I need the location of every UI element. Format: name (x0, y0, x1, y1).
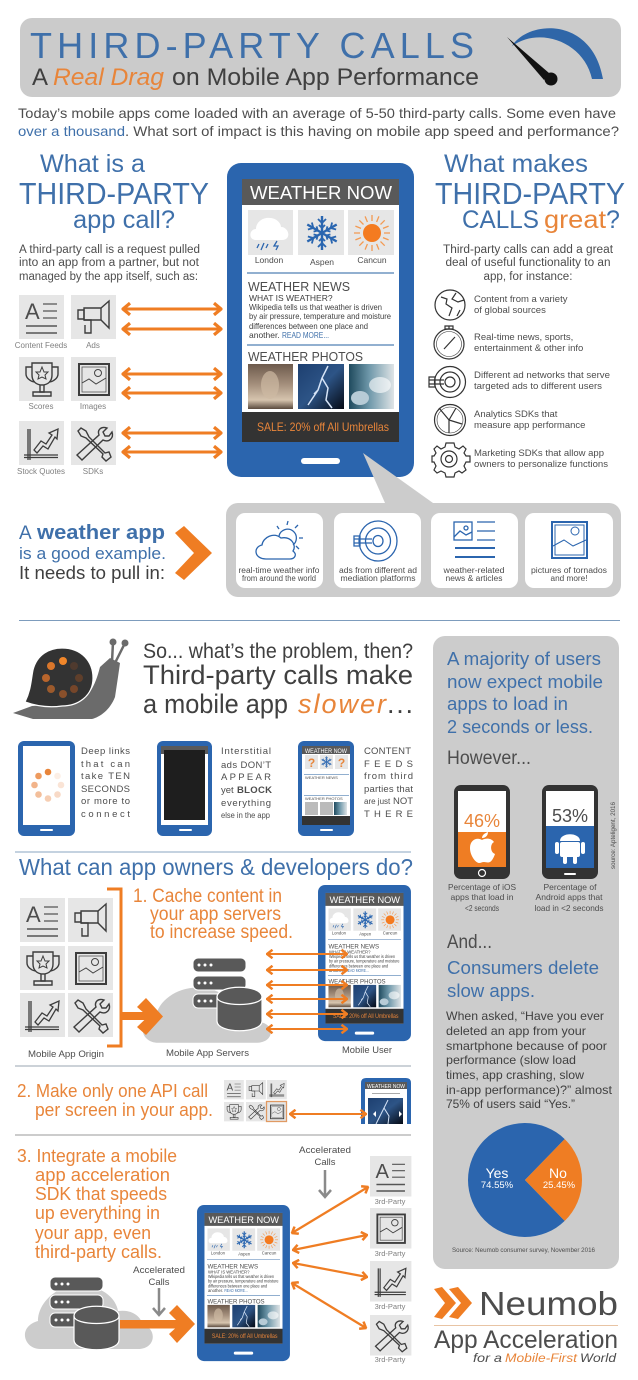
caption: content feeds: CONTENT (364, 746, 411, 757)
mobile app servers cloud (143, 958, 271, 1043)
consumers delete heading: Consumers delete (447, 957, 599, 978)
accelerated calls label top: Calls (314, 1157, 336, 1168)
benefit: global sources: Content from a variety (474, 294, 568, 305)
heading: what is a third-party app call: What is a (40, 150, 145, 178)
heading: the problem: a mobile app (143, 689, 288, 719)
Android caption: load in <2 seconds (534, 903, 604, 913)
step 2 phone: WEATHER NOW (367, 1084, 406, 1090)
phone: Android 53% (542, 785, 598, 879)
mobile user phone: London (332, 931, 347, 936)
benefit: global sources (474, 294, 568, 316)
heading: the problem: . . . (387, 689, 413, 719)
caption: content feeds: NOT (393, 796, 413, 807)
weather app example text: A (19, 523, 32, 544)
mobile user phone: WEATHER PHOTOS (328, 978, 386, 985)
heading: what can developers do: What can app owners & developers do? (19, 854, 413, 880)
heading: what makes third-party calls great (435, 150, 625, 234)
caption: deep links (81, 746, 130, 820)
benefit: ad networks (474, 370, 610, 392)
Neumob logo (434, 1285, 618, 1365)
problem: missing content feeds (298, 741, 413, 836)
icon labels: Ads (86, 341, 100, 350)
third-party icon grid (15, 295, 116, 476)
heading: what makes third-party calls great: great (544, 206, 606, 234)
card: real-time weather (236, 513, 323, 588)
heading: what makes third-party calls great: ? (606, 206, 620, 234)
step 1 labels: Mobile App Servers (166, 1048, 249, 1059)
heading: the problem: slower (298, 689, 387, 719)
phone: weather app (227, 163, 414, 477)
icon labels: SDKs (83, 467, 103, 476)
benefit: marketing SDKs: Marketing SDKs that allow app (474, 448, 604, 459)
caption: interstitial: Interstitial (221, 746, 271, 757)
icon: SDKs (71, 421, 116, 465)
icon: stopwatch (434, 326, 464, 359)
step 3 phone: Cancun (262, 1251, 277, 1256)
heading: what is a third-party app call (19, 150, 209, 234)
source note: source: Apteligent, 2016 (610, 802, 617, 869)
caption: deep links: connect (81, 809, 130, 820)
benefits intro text: app, for instance: (484, 271, 572, 283)
step 3 phone: Wikipedia tells us that weather is driven (208, 1274, 275, 1279)
iOS caption (448, 882, 516, 913)
icon: scores (19, 357, 64, 401)
phone: weather app: WEATHER NOW (250, 183, 392, 203)
caption: deep links: Deep links (81, 746, 130, 757)
benefit: marketing SDKs (474, 448, 608, 470)
expectation heading: 2 seconds or less. (447, 716, 593, 737)
Android caption: Percentage of (544, 882, 597, 892)
however: However... (447, 748, 531, 769)
caption: deep links: or more to (81, 796, 130, 807)
consumers delete heading (447, 957, 599, 1001)
step 3 text: up everything in (35, 1202, 160, 1223)
survey paragraph: times, app crashing, slow (446, 1068, 584, 1082)
caption: interstitial (221, 746, 272, 820)
card: real-time weather: real-time weather info (238, 566, 320, 575)
mobile user phone: differences between one place and (329, 964, 389, 969)
mobile user phone: WHAT IS WEATHER? (329, 950, 371, 955)
step 2 text: per screen in your app. (35, 1099, 213, 1120)
mobile user phone: SALE: 20% off All Umbrellas (333, 1014, 399, 1020)
third-party icons column (370, 1156, 411, 1364)
mobile user phone: Cancun (383, 931, 398, 936)
mobile user phone: Aspen (359, 932, 372, 937)
pie chart (468, 1123, 582, 1237)
expectation heading: now expect mobile (447, 671, 603, 692)
weather app example text: weather app (36, 522, 165, 544)
expectation heading: A majority of users (447, 648, 601, 669)
step 3 phone: WHAT IS WEATHER? (208, 1270, 250, 1275)
card: ad mediation: ads from different ad (339, 566, 417, 575)
caption: content feeds: from third (364, 771, 413, 782)
iOS caption: Percentage of iOS (448, 882, 516, 892)
problem: interstitial ads (157, 741, 272, 836)
step 3 phone: another. (208, 1288, 223, 1293)
caption: deep links: SECONDS (81, 784, 130, 795)
caption: content feeds: THERE (364, 809, 413, 820)
intro text: . What sort of impact is this having on mobile app speed and performance? (125, 123, 619, 139)
survey paragraph: in-app performance)?” almost (446, 1083, 613, 1097)
survey paragraph: 75% of users said “Yes.” (446, 1097, 575, 1111)
title: THIRD-PARTY CALLS (30, 25, 474, 66)
accelerated calls label bottom: Calls (148, 1277, 170, 1288)
step 3 text: 3. Integrate a mobile (17, 1145, 177, 1166)
step 3 phone: SALE: 20% off All Umbrellas (212, 1334, 278, 1340)
step 1 origin icons (20, 898, 113, 1037)
benefit: real-time news: entertainment & other info (474, 343, 583, 354)
iOS caption: apps that load in (450, 892, 514, 902)
pie chart: 74.55% (481, 1180, 514, 1191)
intro text (18, 105, 619, 139)
icon: ads (71, 295, 116, 339)
icon: snail (13, 638, 128, 719)
pie chart: No (549, 1165, 567, 1181)
problem: slow deep links (18, 741, 130, 836)
card: pictures of tornados: and more! (550, 574, 588, 583)
card: ad mediation: mediation platforms (340, 574, 416, 583)
big arrow to phone (120, 1305, 195, 1343)
benefit: analytics: measure app performance (474, 420, 585, 431)
step 3 text: your app, even (35, 1222, 151, 1243)
step 1 text: to increase speed. (150, 922, 293, 943)
Neumob logo: World (580, 1351, 616, 1365)
subtitle (32, 64, 479, 91)
mobile user phone: WEATHER NEWS (328, 944, 380, 951)
step 1 labels: Mobile App Origin (28, 1049, 104, 1060)
benefit: global sources: of global sources (474, 305, 546, 316)
caption: interstitial: BLOCK (237, 785, 272, 796)
step 3 phone: WEATHER NEWS (207, 1264, 259, 1271)
Neumob logo: Mobile-First (505, 1351, 578, 1365)
step 3 phone: Aspen (238, 1252, 251, 1257)
caption: interstitial: yet (221, 785, 234, 796)
benefit: ad networks: Different ad networks that serve (474, 370, 610, 381)
definition text: managed by the app itself, such as: (19, 271, 198, 283)
icon labels: Stock Quotes (17, 467, 65, 476)
step 2 phone (361, 1078, 411, 1124)
phone: weather app: London (255, 255, 283, 265)
chevron arrow (175, 526, 212, 580)
Android caption: Android apps that (536, 892, 603, 902)
card: pictures of tornados (525, 513, 613, 588)
weather app example text: is a good example. (19, 544, 166, 563)
icon: stock quotes (19, 421, 64, 465)
step 3 phone: WEATHER PHOTOS (207, 1298, 265, 1305)
step 3 phone (197, 1205, 290, 1361)
Neumob logo: Neumob (479, 1285, 618, 1322)
phone: iOS 46% (454, 785, 510, 879)
step 3 phone: WEATHER NOW (208, 1215, 280, 1225)
benefits intro text: Third-party calls can add a great (443, 244, 614, 256)
step 1 labels: Mobile User (342, 1045, 392, 1056)
mobile user phone: READ MORE... (345, 968, 369, 973)
caption: interstitial: APPEAR (221, 772, 271, 783)
benefit: real-time news (474, 332, 583, 354)
benefit: real-time news: Real-time news, sports, (474, 332, 573, 343)
card: pictures of tornados: pictures of tornados (531, 566, 607, 575)
heading: what is a third-party app call: THIRD-PARTY (19, 176, 209, 211)
card: news and articles: weather-related (442, 566, 504, 575)
third-party icons column: 3rd-Party (375, 1197, 406, 1206)
step 3 text: SDK that speeds (35, 1183, 167, 1204)
caption: deep links: that can (81, 759, 130, 770)
callout: what the app pulls in (226, 453, 621, 597)
phone: weather app: differences between one place and (249, 321, 368, 331)
icon: target (429, 366, 466, 398)
mobile user phone (318, 885, 411, 1041)
phone: weather app: by air pressure, temperature and moisture (249, 311, 391, 321)
arrows: servers to user (267, 954, 347, 1029)
phone: missing content: WEATHER NEWS (305, 775, 338, 780)
third-party icons column: 3rd-Party (375, 1249, 406, 1258)
consumers delete heading: slow apps. (447, 980, 535, 1001)
survey paragraph: When asked, “Have you ever (446, 1009, 604, 1023)
header banner (20, 18, 621, 97)
caption: content feeds (364, 746, 413, 820)
step 3 phone: London (211, 1251, 226, 1256)
accelerated calls label bottom (133, 1265, 185, 1315)
step 2 icon grid (224, 1080, 287, 1122)
step 3 phone: by air pressure, temperature and moisture (208, 1279, 279, 1284)
survey paragraph: deleted an app from your (446, 1024, 586, 1038)
heading: the problem: So... what’s the problem, then? (143, 640, 413, 663)
caption: content feeds: parties that (364, 784, 413, 795)
step 3 text: app acceleration (35, 1164, 170, 1185)
survey paragraph (446, 1009, 613, 1111)
step 3 phone: differences between one place and (208, 1284, 268, 1289)
benefits intro text (443, 244, 614, 283)
step 1 labels (28, 1045, 392, 1060)
mobile user phone: by air pressure, temperature and moisture (329, 959, 400, 964)
icon: speedometer gauge (507, 28, 603, 86)
expectation heading (447, 648, 603, 737)
arrows: app to third parties (123, 309, 221, 452)
step 3 text: third-party calls. (35, 1241, 162, 1262)
third-party icons column: 3rd-Party (375, 1355, 406, 1364)
phone: weather app: Wikipedia tells us that weather is driven (249, 302, 382, 312)
phone: weather app: SALE: 20% off All Umbrellas (257, 420, 389, 434)
expectation heading: apps to load in (447, 693, 568, 714)
survey paragraph: performance (slow load (446, 1053, 576, 1067)
subtitle: Real Drag (53, 64, 165, 91)
icon: images (71, 357, 116, 401)
heading: what makes third-party calls great: What makes (444, 150, 588, 178)
phone: weather app: READ MORE... (282, 330, 329, 340)
third-party icons column: 3rd-Party (375, 1302, 406, 1311)
Neumob logo: App Acceleration (434, 1326, 618, 1354)
and: And... (447, 932, 492, 953)
phone: weather app: Aspen (310, 257, 334, 267)
pie chart: Yes (486, 1165, 508, 1181)
arrow: single API call (290, 1113, 366, 1115)
phone: Android 53%: 53% (552, 806, 588, 826)
card: news and articles (431, 513, 518, 588)
benefit: analytics (474, 409, 585, 431)
caption: interstitial: ads DON’T (221, 760, 271, 771)
mobile user phone: another. (329, 968, 344, 973)
heading: what makes third-party calls great: THIRD-PARTY (435, 176, 625, 211)
definition text (19, 244, 200, 283)
arrows: phone to third parties (292, 1187, 368, 1328)
mobile user phone: WEATHER NOW (329, 895, 401, 905)
definition text: into an app from a partner, but not (19, 257, 200, 269)
intro text: over a thousand (18, 123, 125, 139)
iOS caption: <2 seconds (465, 903, 499, 913)
step 1 text (133, 886, 293, 943)
phone: missing content (298, 741, 354, 836)
phone: missing content: ? (308, 756, 315, 770)
definition text: A third-party call is a request pulled (19, 244, 200, 256)
phone: weather app: WEATHER NEWS (248, 279, 350, 294)
icon: gear (432, 443, 470, 477)
subtitle: A (32, 64, 48, 91)
step 3 phone: READ MORE... (224, 1288, 248, 1293)
heading: what is a third-party app call: app call? (73, 206, 175, 234)
phone: weather app: another. (249, 330, 280, 340)
phone: weather app: WHAT IS WEATHER? (249, 293, 333, 303)
caption: deep links: take TEN (81, 771, 130, 782)
pie chart: 25.45% (543, 1180, 576, 1191)
phone: missing content: WEATHER PHOTOS (305, 796, 343, 801)
benefits intro text: deal of useful functionality to an (446, 257, 610, 269)
card: real-time weather: from around the world (242, 574, 316, 583)
heading: the problem: Third-party calls make (143, 660, 413, 690)
phone: loading spinner (18, 741, 75, 836)
weather app example text: It needs to pull in: (19, 563, 165, 583)
benefit: analytics: Analytics SDKs that (474, 409, 558, 420)
benefit: ad networks: targeted ads to different users (474, 381, 602, 392)
icon labels: Scores (29, 402, 53, 411)
caption: interstitial: else in the app (221, 811, 271, 820)
heading: the problem (143, 640, 413, 719)
caption: interstitial: everything (221, 798, 271, 809)
mobile user phone: Wikipedia tells us that weather is driven (329, 954, 396, 959)
acceleration servers cloud (25, 1277, 153, 1350)
survey paragraph: smartphone because of poor (446, 1039, 607, 1053)
heading: what makes third-party calls great: CALLS (462, 206, 539, 234)
icon: content feeds (19, 295, 64, 339)
step 3 text (17, 1145, 177, 1262)
caption: content feeds: FEEDS (364, 759, 413, 770)
benefits list (429, 290, 610, 477)
accelerated calls label bottom: Accelerated (133, 1265, 185, 1276)
step 1 text: your app servers (150, 904, 281, 925)
survey source: Source: Neumob consumer survey, November 2016 (452, 1248, 596, 1254)
bracket arrow to servers (107, 889, 163, 1046)
benefit: marketing SDKs: owners to personalize functions (474, 459, 608, 470)
icon: analytics pie (434, 404, 466, 436)
phone: weather app: WEATHER PHOTOS (248, 349, 363, 364)
phone: missing content: WEATHER NOW (305, 749, 347, 755)
intro text: Today’s mobile apps come loaded with an average of 5-50 third-party calls. Some even have (18, 105, 616, 121)
icon labels: Content Feeds (15, 341, 67, 350)
icon: globe (435, 290, 465, 320)
icon: double chevron (434, 1287, 472, 1319)
step 2 text (17, 1080, 213, 1120)
phone: blocked screen (157, 741, 212, 836)
step 2 text: 2. Make only one API call (17, 1080, 208, 1101)
subtitle: on Mobile App Performance (172, 64, 479, 91)
weather app example text (19, 522, 166, 583)
icon labels (15, 341, 106, 476)
phone: weather app: Cancun (357, 255, 387, 265)
accelerated calls label top (299, 1145, 351, 1197)
phone: iOS 46%: 46% (464, 811, 500, 831)
phone: missing content: ? (338, 756, 345, 770)
panel: user expectations (433, 636, 619, 1269)
card: news and articles: news & articles (446, 574, 503, 583)
step 1 text: 1. Cache content in (133, 886, 282, 907)
accelerated calls label top: Accelerated (299, 1145, 351, 1156)
card: ad mediation (334, 513, 421, 588)
icon labels: Images (80, 402, 106, 411)
Android caption (534, 882, 604, 913)
Neumob logo: for a (473, 1351, 502, 1365)
caption: content feeds: are just (364, 797, 391, 806)
